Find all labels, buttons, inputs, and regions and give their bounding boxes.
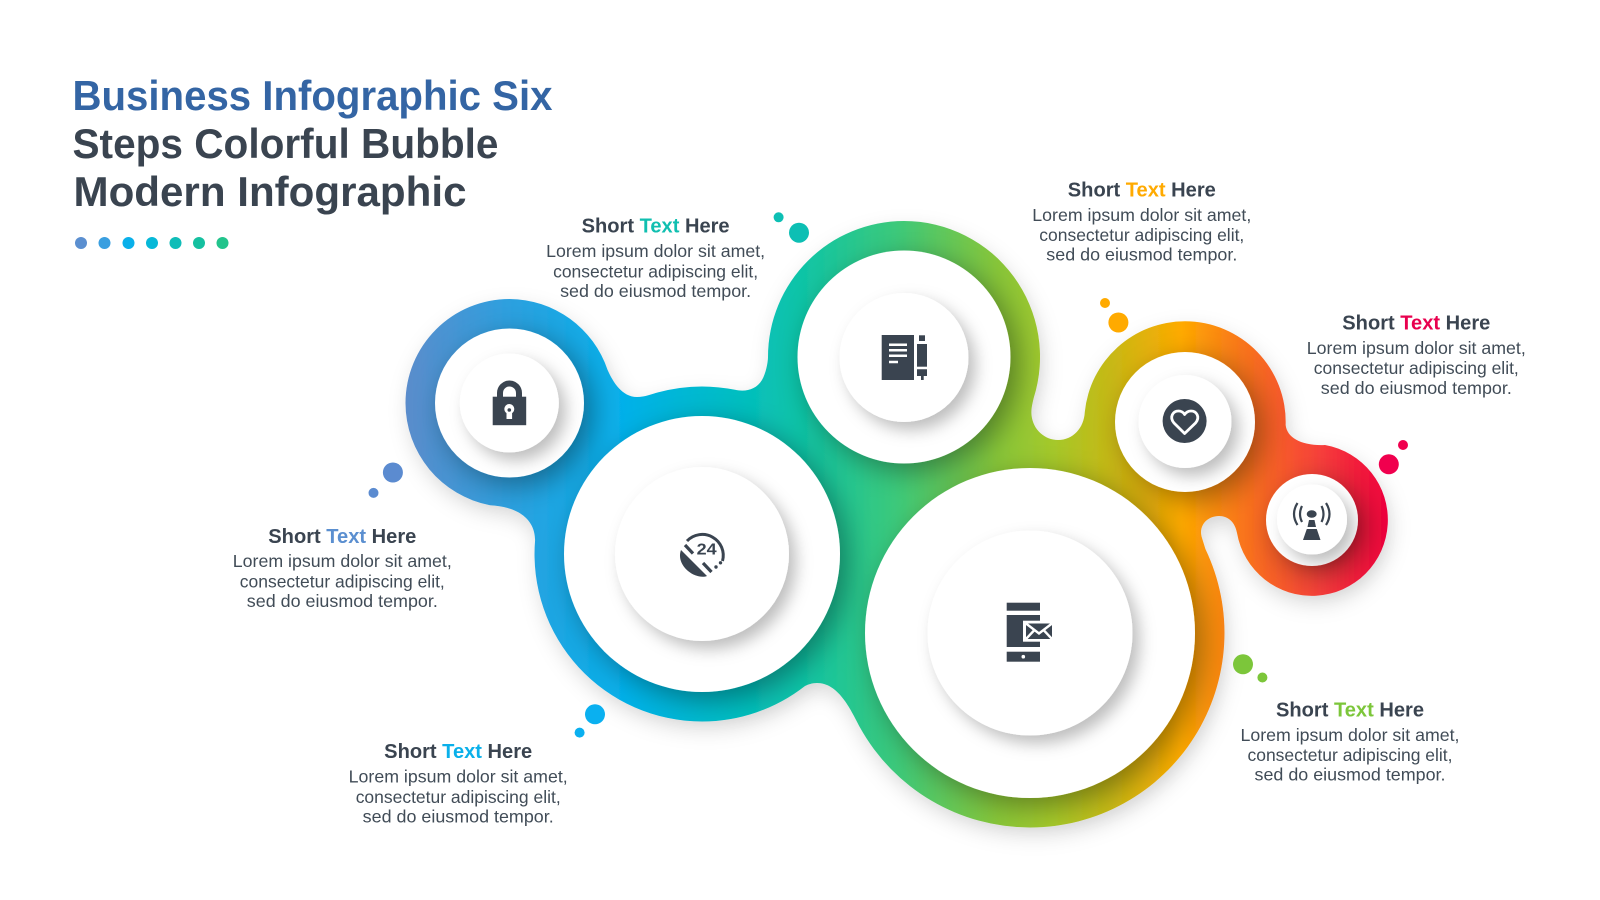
text block: step 1: Short Text Here	[268, 526, 416, 548]
gradient bubble ribbon	[406, 221, 1388, 828]
text block: step 3: Short Text Here	[582, 216, 730, 238]
accent dots: step 1	[368, 462, 403, 498]
icon: padlock	[493, 384, 526, 425]
text block: step 2: consectetur adipiscing elit,	[356, 787, 561, 807]
icon: broadcast antenna	[1294, 503, 1330, 540]
white inner circles	[460, 293, 1347, 736]
accent dots: step 2	[575, 704, 605, 738]
accent dots: step 3	[774, 212, 809, 243]
text block: step 2	[349, 741, 568, 826]
text block: step 3: Lorem ipsum dolor sit amet,	[546, 241, 765, 261]
accent dots: step 5	[1379, 440, 1408, 474]
text block: step 2: sed do eiusmod tempor.	[363, 806, 554, 826]
text block: step 6	[1240, 699, 1460, 785]
icon: 24 hour phone	[680, 534, 723, 577]
text block: step 5: consectetur adipiscing elit,	[1314, 358, 1519, 378]
text block: step 3	[546, 216, 765, 301]
text block: step 6: Lorem ipsum dolor sit amet,	[1240, 725, 1460, 745]
text block: step 6: sed do eiusmod tempor.	[1254, 765, 1446, 785]
text block: step 1: Lorem ipsum dolor sit amet,	[233, 551, 452, 571]
text block: step 5: Short Text Here	[1342, 313, 1490, 335]
icon: notebook and pen	[882, 335, 927, 380]
text block: step 6: Short Text Here	[1276, 699, 1424, 721]
text block: step 3: sed do eiusmod tempor.	[560, 281, 751, 301]
title: Business Infographic Six	[72, 72, 553, 119]
text block: step 1	[233, 526, 452, 611]
text block: step 2: Lorem ipsum dolor sit amet,	[349, 767, 568, 787]
text block: step 3: consectetur adipiscing elit,	[553, 262, 758, 282]
accent dots: step 6	[1233, 654, 1267, 682]
accent dots: step 4	[1100, 298, 1128, 332]
title: Steps Colorful Bubble	[72, 120, 498, 167]
text block: step 4: sed do eiusmod tempor.	[1046, 245, 1237, 265]
text block: step 6: consectetur adipiscing elit,	[1248, 745, 1452, 765]
text block: step 5: sed do eiusmod tempor.	[1321, 378, 1512, 398]
text block: step 1: sed do eiusmod tempor.	[247, 591, 438, 611]
white outer circles	[435, 250, 1358, 798]
text block: step 4	[1032, 179, 1251, 265]
text block: step 1: consectetur adipiscing elit,	[240, 571, 445, 591]
text block: step 4: consectetur adipiscing elit,	[1039, 225, 1244, 245]
title dot row	[75, 237, 228, 249]
text block: step 2: Short Text Here	[384, 741, 532, 763]
icon: 24 hour phone: 24	[697, 542, 717, 558]
text block: step 5	[1307, 313, 1526, 398]
title: Modern Infographic	[74, 168, 467, 215]
title	[72, 72, 553, 215]
text block: step 4: Lorem ipsum dolor sit amet,	[1032, 205, 1251, 225]
icon: mobile with envelope	[1007, 603, 1055, 662]
text block: step 5: Lorem ipsum dolor sit amet,	[1307, 338, 1526, 358]
text block: step 4: Short Text Here	[1068, 179, 1216, 201]
icon: heart badge	[1163, 399, 1207, 443]
